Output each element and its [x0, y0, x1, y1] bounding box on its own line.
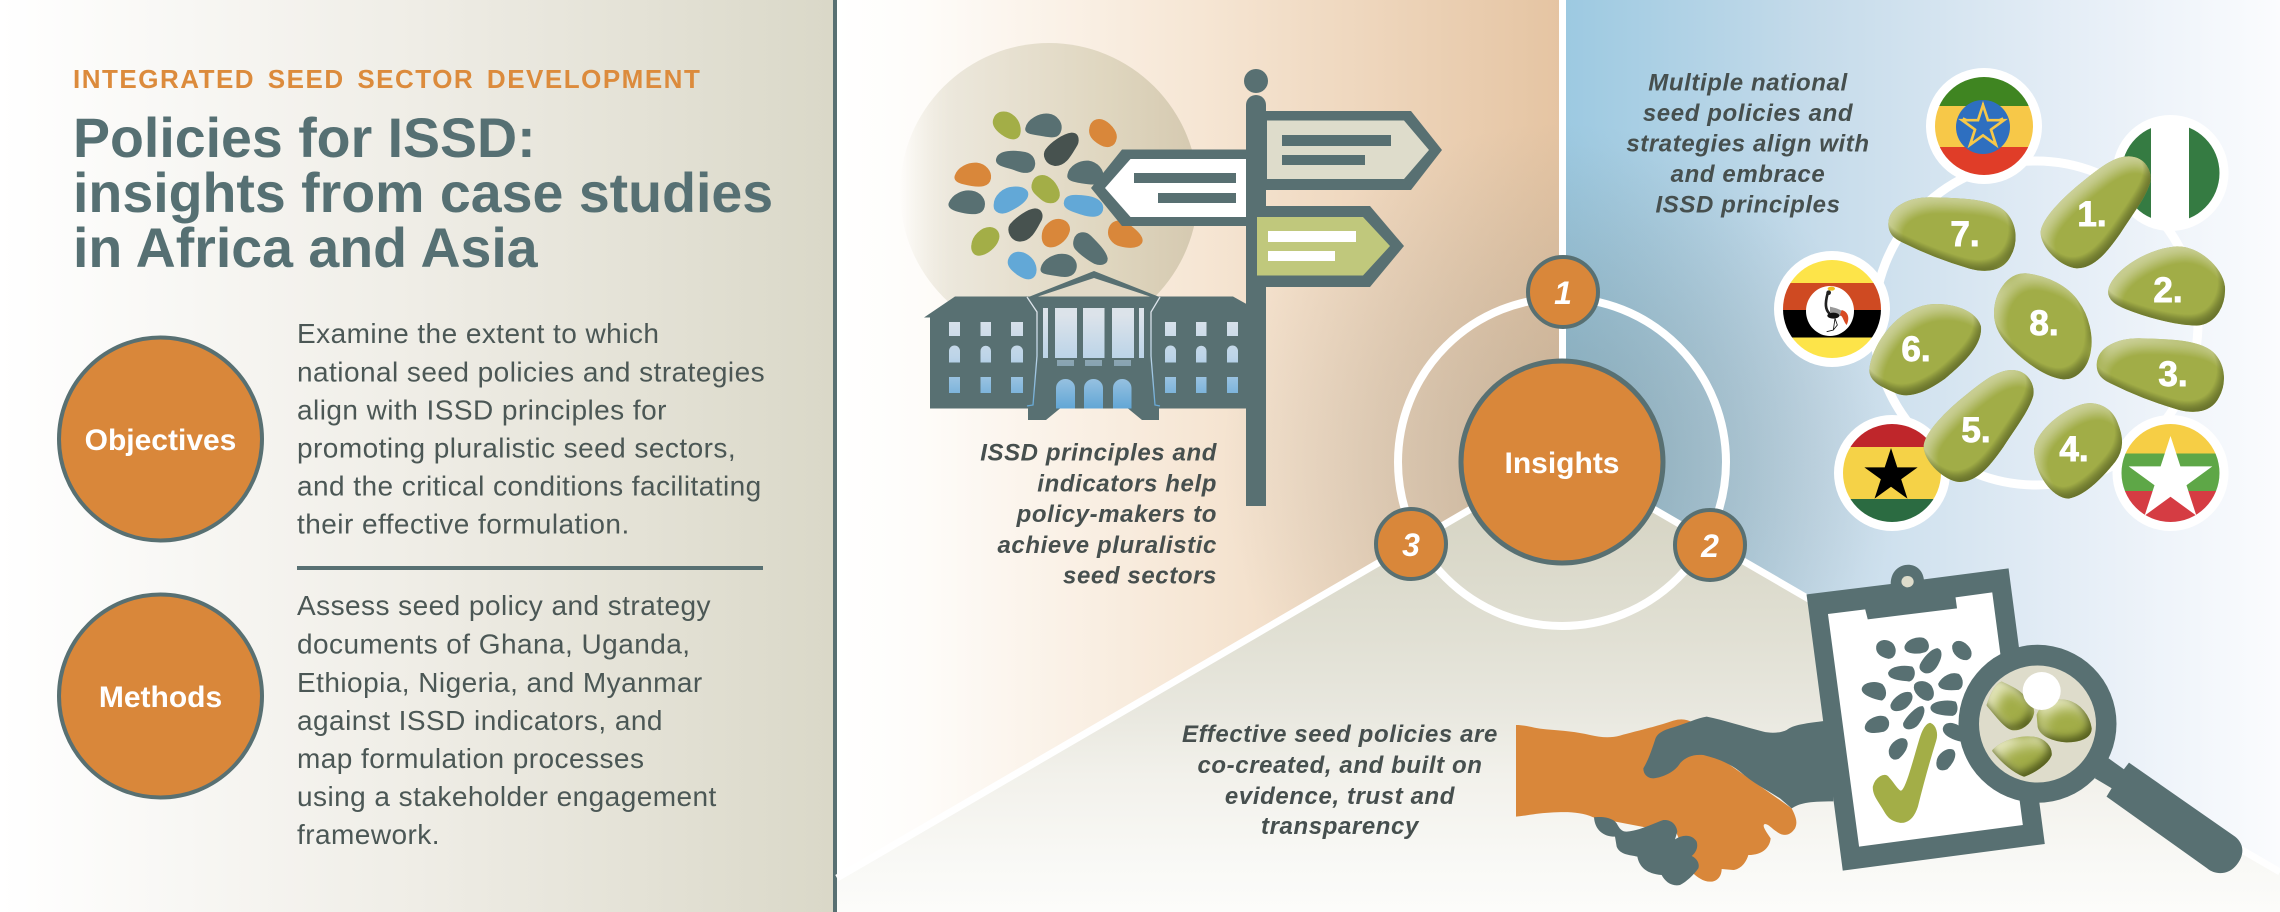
text block: methods: framework.: [297, 819, 440, 850]
panel: national policies background: [1562, 0, 2280, 912]
badge: 3: [1376, 509, 1446, 579]
text block: methods: Assess seed policy and strategy: [297, 590, 711, 621]
text block: methods: [297, 590, 717, 850]
text block: objectives: align with ISSD principles for: [297, 394, 667, 426]
clipboard seeds: [1863, 639, 1970, 822]
text block: methods: map formulation processes: [297, 743, 644, 774]
shading around the insights ring: [1200, 100, 1920, 820]
diagram: ring linking country flags: [1874, 161, 2198, 485]
badge: objectives: [59, 338, 262, 540]
badge: 3: 3: [1402, 527, 1420, 563]
flag: Ethiopia: [1926, 68, 2042, 184]
text block: multiple national policies: Multiple national: [1648, 70, 1848, 96]
icon: government building: [924, 271, 1250, 420]
text block: objectives: their effective formulation.: [297, 508, 630, 540]
text block: objectives: Examine the extent to which: [297, 318, 659, 349]
seed numbers: 5.: [1961, 411, 1991, 450]
icon: check mark: [1874, 724, 1936, 822]
icon: handshake: [1516, 717, 1833, 885]
text block: effective seed policies: evidence, trust and: [1225, 783, 1456, 810]
text block: multiple national policies: ISSD principles: [1655, 192, 1841, 218]
text block: ISSD principles: achieve pluralistic: [997, 532, 1217, 559]
text block: effective seed policies: Effective seed policies are: [1182, 721, 1498, 748]
badge: insights centre: [1461, 361, 1663, 563]
flag: Ghana: [1834, 415, 1950, 531]
text block: ISSD principles: ISSD principles and: [980, 440, 1218, 466]
text block: methods: using a stakeholder engagement: [297, 781, 717, 812]
seed shapes: [1872, 159, 2222, 496]
text block: ISSD principles: [980, 440, 1218, 590]
icon: seed cloud: [950, 113, 1141, 278]
text block: multiple national policies: [1626, 70, 1870, 218]
text block: objectives: [297, 318, 765, 540]
icon: clipboard: [1807, 565, 2045, 871]
title: insights from case studies: [73, 162, 773, 224]
text block: ISSD principles: seed sectors: [1063, 562, 1217, 590]
text block: effective seed policies: co-created, and built on: [1197, 752, 1483, 779]
seed numbers: 2.: [2153, 271, 2183, 310]
text block: methods: Ethiopia, Nigeria, and Myanmar: [297, 667, 703, 698]
icon: handshake, clipboard and magnifier: [1516, 565, 2242, 885]
title: [73, 107, 773, 279]
text block: multiple national policies: strategies align with: [1626, 130, 1870, 158]
text block: objectives: national seed policies and strategies: [297, 356, 765, 388]
icon: signpost: [1091, 69, 1442, 506]
text block: objectives: promoting pluralistic seed sectors,: [297, 432, 736, 464]
title: Policies for ISSD:: [73, 107, 536, 169]
seed numbers: 4.: [2059, 430, 2089, 469]
panel: left background: [0, 0, 833, 912]
text block: effective seed policies: [1182, 721, 1498, 840]
diagram: insights ring: [837, 0, 2280, 878]
seed numbers: 7.: [1950, 215, 1980, 254]
icon: magnifying glass: [1958, 645, 2242, 873]
heading: programme label: INTEGRATED SEED SECTOR DEVELOPMENT: [73, 64, 701, 94]
text block: multiple national policies: and embrace: [1671, 161, 1825, 188]
text block: methods: against ISSD indicators, and: [297, 705, 663, 736]
badge: 1: [1528, 257, 1598, 327]
seed numbers: 8.: [2029, 304, 2059, 343]
flag: Uganda: [1774, 251, 1890, 367]
text block: ISSD principles: policy-makers to: [1016, 501, 1217, 528]
seed numbers: 1.: [2077, 195, 2107, 234]
flag: Myanmar: [2112, 415, 2228, 531]
icon: seeds circle, building and signpost: [900, 43, 1442, 506]
badge: objectives: Objectives: [85, 424, 236, 457]
seed numbers: [1901, 195, 2188, 469]
badge: 2: [1675, 510, 1745, 580]
diagram: eight numbered seeds: [1872, 159, 2222, 496]
badge: methods: [59, 594, 262, 798]
panel: policy insight background: [837, 0, 1562, 912]
panel: co-creation background: [837, 456, 2280, 912]
seed numbers: 3.: [2158, 355, 2188, 394]
badge: methods: Methods: [99, 681, 222, 714]
badge: 1: 1: [1554, 275, 1572, 311]
text block: effective seed policies: transparency: [1261, 813, 1420, 840]
flag: Nigeria: [2112, 115, 2228, 231]
text block: ISSD principles: indicators help: [1037, 470, 1217, 498]
text block: objectives: and the critical conditions facilitating: [297, 470, 762, 502]
icon: backdrop circle: [900, 43, 1198, 341]
title: in Africa and Asia: [73, 217, 539, 279]
badge: 2: 2: [1700, 528, 1719, 564]
text block: multiple national policies: seed policies and: [1643, 100, 1854, 127]
seed numbers: 6.: [1901, 330, 1931, 369]
shading on the blue side of the ring: [1566, 140, 1896, 780]
text block: methods: documents of Ghana, Uganda,: [297, 628, 691, 660]
badge: insights centre: Insights: [1504, 447, 1620, 480]
